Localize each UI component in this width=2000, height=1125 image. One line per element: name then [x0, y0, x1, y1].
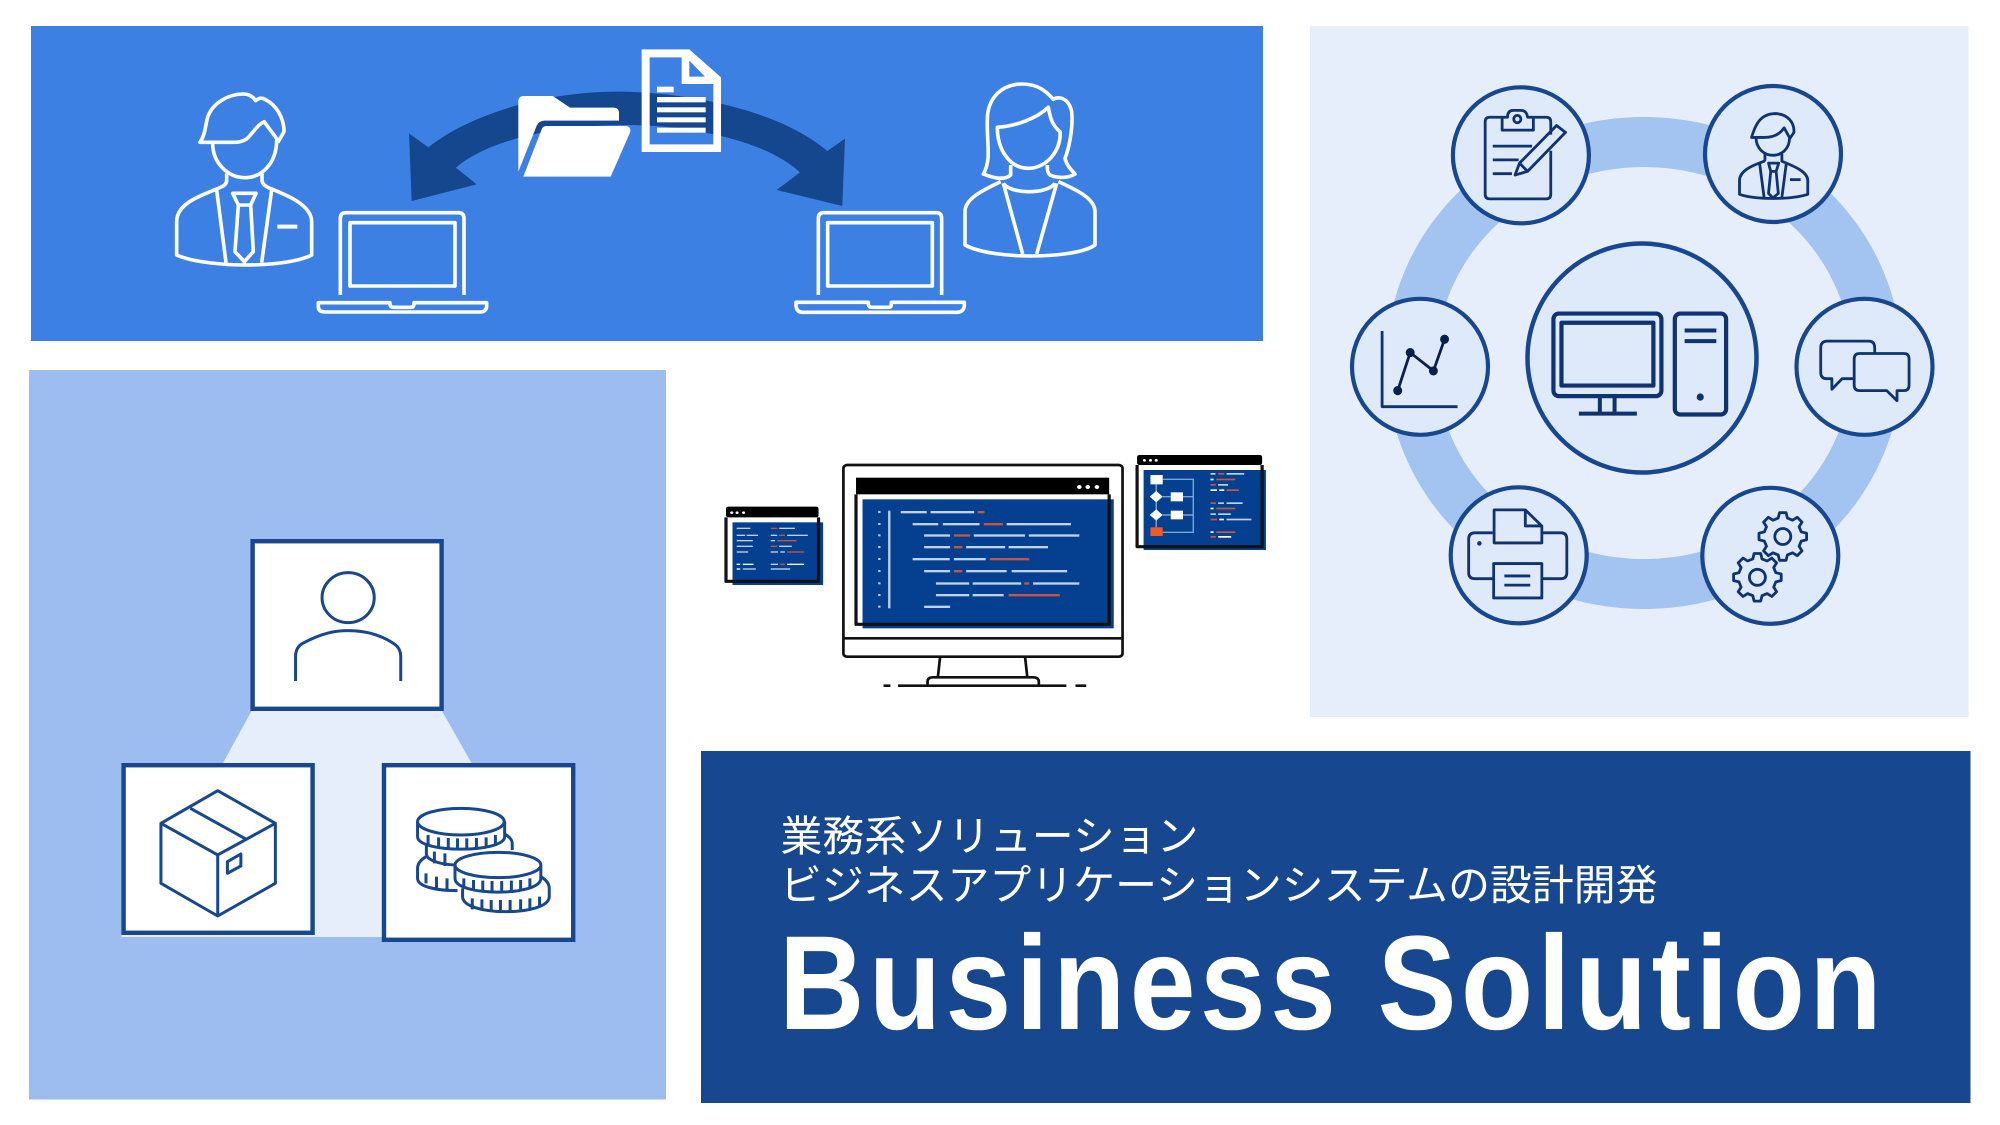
- pale connector between the boxes: [122, 711, 472, 937]
- node: clipboard and pencil: [1453, 87, 1589, 223]
- icon: document: [642, 49, 721, 152]
- node: chat bubbles: [1796, 299, 1932, 435]
- node: printer: [1451, 487, 1587, 623]
- ring connecting the icons: [1411, 142, 1877, 584]
- box: coin stacks icon: [384, 765, 573, 940]
- icon: left laptop: [318, 213, 487, 312]
- left floating window: [726, 507, 823, 585]
- node: businessman: [1705, 86, 1841, 222]
- illustration: code editor on a monitor with floating windows: [726, 455, 1266, 686]
- centre node: desktop computer: [1528, 244, 1756, 472]
- node: line chart: [1352, 299, 1488, 435]
- right floating window with flowchart: [1137, 455, 1266, 550]
- main title: Business Solution: [779, 909, 1886, 1058]
- icon: businesswoman: [965, 84, 1095, 256]
- panel: file sharing between two users: [31, 26, 1263, 341]
- subtitle: line one: 業務系ソリューション: [780, 813, 1198, 860]
- subtitle: line two: ビジネスアプリケーションシステムの設計開発: [780, 862, 1658, 909]
- icon: businessman: [177, 94, 312, 265]
- box: person icon: [253, 541, 442, 709]
- icon: open folder: [518, 96, 630, 177]
- panel: title banner: [701, 751, 1970, 1103]
- panel: person with goods and money: [29, 370, 666, 1100]
- main code window: [856, 478, 1114, 628]
- box: cardboard package icon: [124, 765, 313, 933]
- monitor: [843, 465, 1123, 686]
- icon: curved double-headed arrow: [409, 92, 845, 206]
- icon: right laptop: [796, 213, 964, 312]
- panel: computer hub with peripheral functions: [1310, 26, 1968, 717]
- node: gears: [1702, 488, 1838, 624]
